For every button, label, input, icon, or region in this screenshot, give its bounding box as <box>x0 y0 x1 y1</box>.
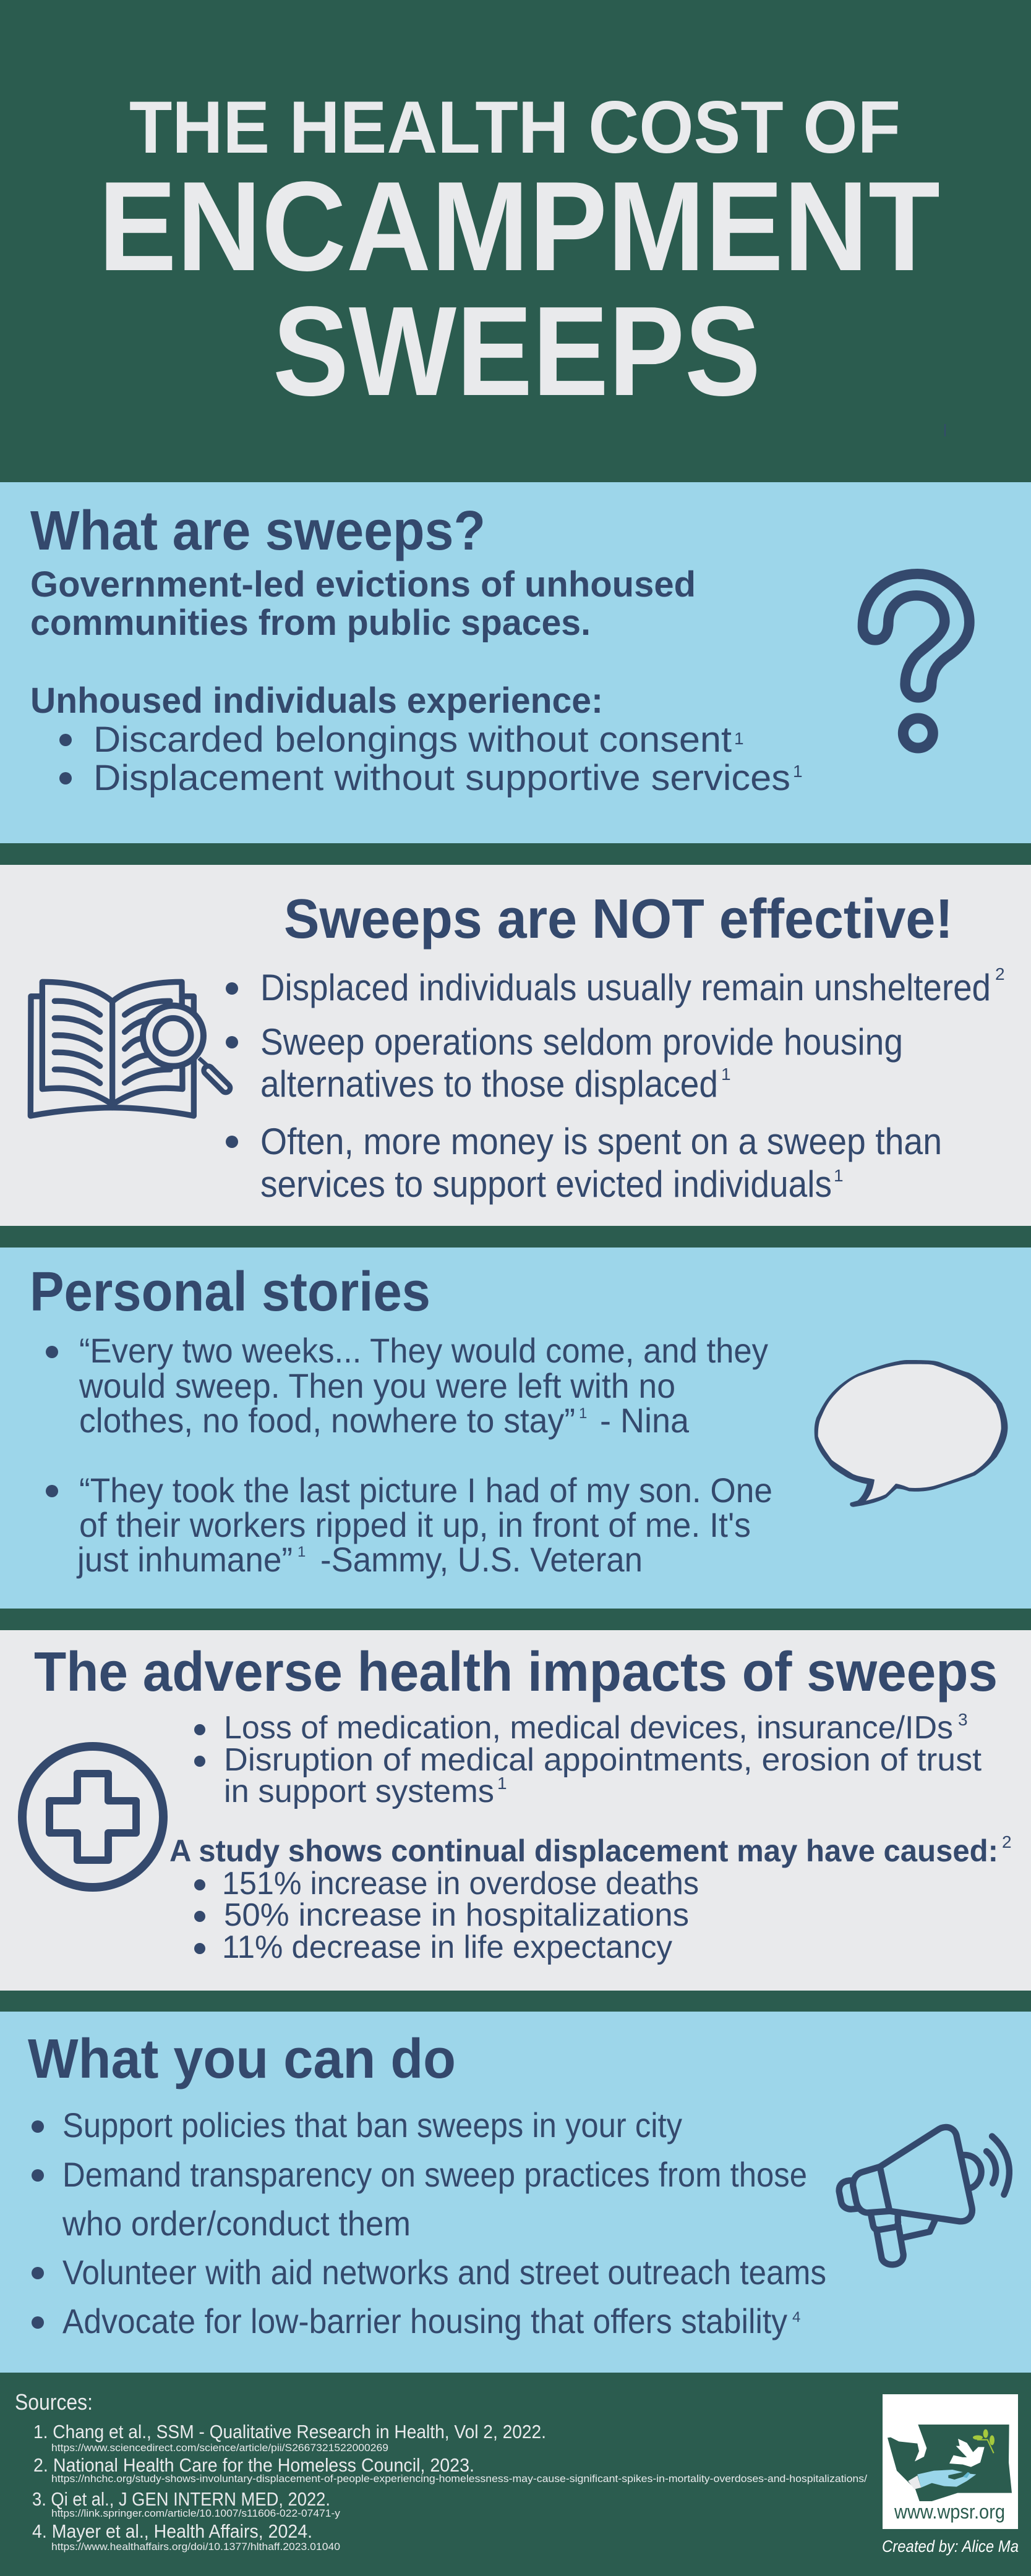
quote: Nina: “Every two weeks... They would come, and they <box>79 1331 768 1370</box>
quote: Sammy: 1 <box>297 1544 306 1560</box>
text: study finding: A study shows continual displacement may have caused: <box>169 1834 998 1868</box>
panel: sweeps are not effective <box>0 865 1031 1226</box>
source 4: https://www.healthaffairs.org/doi/10.1377/hlthaff.2023.01040 <box>51 2541 340 2553</box>
list: health losses: Loss of medication, medical devices, insurance/IDs <box>224 1710 953 1746</box>
source 2 <box>33 2454 867 2485</box>
list: why sweeps fail: 1 <box>834 1166 844 1185</box>
list: experiences: 1 <box>793 762 803 781</box>
title <box>98 86 940 422</box>
list: actions: Support policies that ban sweeps in your city <box>62 2106 682 2145</box>
title: THE HEALTH COST OF <box>129 86 901 169</box>
text: study finding: 2 <box>1002 1832 1012 1851</box>
heading: adverse health impacts: The adverse health impacts of sweeps <box>34 1641 998 1703</box>
source 2: 2. National Health Care for the Homeless Council, 2023. <box>33 2454 474 2476</box>
heading: what are sweeps: What are sweeps? <box>30 500 486 562</box>
source 4 <box>32 2520 340 2553</box>
source 3: https://link.springer.com/article/10.1007/s11606-022-07471-y <box>51 2507 340 2519</box>
list: health losses: in support systems <box>224 1774 494 1809</box>
icon: question mark <box>863 574 969 748</box>
text: unhoused individuals experience: Unhoused individuals experience: <box>30 681 603 721</box>
quote: Sammy: of their workers ripped it up, in front of me. It's <box>79 1505 751 1544</box>
heading: what you can do: What you can do <box>28 2028 456 2090</box>
source 1: https://www.sciencedirect.com/science/article/pii/S2667321522000269 <box>51 2442 388 2454</box>
panel: what you can do <box>0 2012 1031 2373</box>
quote: Nina: - Nina <box>600 1401 690 1440</box>
text: definition <box>30 564 696 643</box>
list: why sweeps fail: 1 <box>721 1065 731 1084</box>
list: health losses <box>194 1710 982 1809</box>
sources <box>15 2389 867 2553</box>
list: why sweeps fail: 2 <box>995 964 1005 984</box>
list: study statistics: 11% decrease in life expectancy <box>222 1929 672 1965</box>
panel: adverse health impacts <box>0 1630 1031 1991</box>
quote: Nina: 1 <box>579 1405 587 1422</box>
text: definition: Government-led evictions of unhoused <box>30 564 696 605</box>
source 1: 1. Chang et al., SSM - Qualitative Research in Health, Vol 2, 2022. <box>33 2421 546 2442</box>
list: experiences <box>59 720 803 798</box>
quote: Nina: would sweep. Then you were left with no <box>79 1366 675 1405</box>
source 3: 3. Qi et al., J GEN INTERN MED, 2022. <box>32 2488 330 2510</box>
logo: WPSR <box>883 2394 1018 2529</box>
text: definition: communities from public spaces. <box>30 603 591 643</box>
list: actions: 4 <box>792 2309 800 2326</box>
icon: book and magnifier <box>30 982 226 1116</box>
list: experiences: 1 <box>734 729 744 748</box>
quote: Sammy: -Sammy, U.S. Veteran <box>320 1540 643 1579</box>
quote: Nina: clothes, no food, nowhere to stay” <box>79 1401 575 1440</box>
list: why sweeps fail: Often, more money is spent on a sweep than <box>260 1121 942 1162</box>
quote: Sammy <box>46 1471 772 1579</box>
list: why sweeps fail: services to support evicted individuals <box>260 1163 832 1205</box>
list: experiences: Displacement without supportive services <box>93 758 790 798</box>
quote: Nina <box>46 1331 768 1440</box>
sources: Sources: <box>15 2389 93 2415</box>
list: why sweeps fail: Sweep operations seldom provide housing <box>260 1021 903 1063</box>
heading: personal stories: Personal stories <box>30 1261 430 1323</box>
list: actions: who order/conduct them <box>62 2204 411 2243</box>
list: why sweeps fail: alternatives to those displaced <box>260 1063 718 1105</box>
icon: megaphone <box>839 2127 1009 2264</box>
title: ENCAMPMENT <box>98 155 940 297</box>
title: SWEEPS <box>273 280 761 422</box>
icon: speech bubble <box>815 1360 1007 1507</box>
quote: Sammy: “They took the last picture I had of my son. One <box>79 1471 772 1510</box>
source 3 <box>32 2488 340 2519</box>
list: actions: Volunteer with aid networks and street outreach teams <box>62 2253 826 2292</box>
list: actions: Advocate for low-barrier housing that offers stability <box>62 2302 787 2340</box>
source 2: https://nhchc.org/study-shows-involuntary-displacement-of-people-experiencing-homelessness-may-cause-significant-spikes-in-mortality-overdoses-and-hospitalizations/ <box>51 2473 867 2485</box>
list: study statistics <box>194 1866 699 1965</box>
icon: medical cross <box>22 1746 163 1887</box>
logo: WPSR: www.wpsr.org <box>894 2501 1005 2523</box>
list: health losses: Disruption of medical appointments, erosion of trust <box>224 1742 982 1778</box>
panel: what are sweeps <box>0 482 1031 843</box>
quote: Sammy: just inhumane” <box>76 1540 293 1579</box>
list: actions: Demand transparency on sweep practices from those <box>62 2155 807 2194</box>
heading: not effective: Sweeps are NOT effective! <box>284 888 953 950</box>
panel: personal stories <box>0 1248 1031 1609</box>
list: study statistics: 151% increase in overdose deaths <box>222 1866 699 1902</box>
list: health losses: 1 <box>497 1774 507 1793</box>
list: experiences: Discarded belongings without consent <box>93 720 732 760</box>
list: actions <box>32 2106 826 2340</box>
list: why sweeps fail <box>226 964 1005 1205</box>
source 1 <box>33 2421 546 2454</box>
list: study statistics: 50% increase in hospitalizations <box>224 1897 689 1933</box>
source 4: 4. Mayer et al., Health Affairs, 2024. <box>32 2520 312 2542</box>
list: health losses: 3 <box>958 1710 968 1729</box>
